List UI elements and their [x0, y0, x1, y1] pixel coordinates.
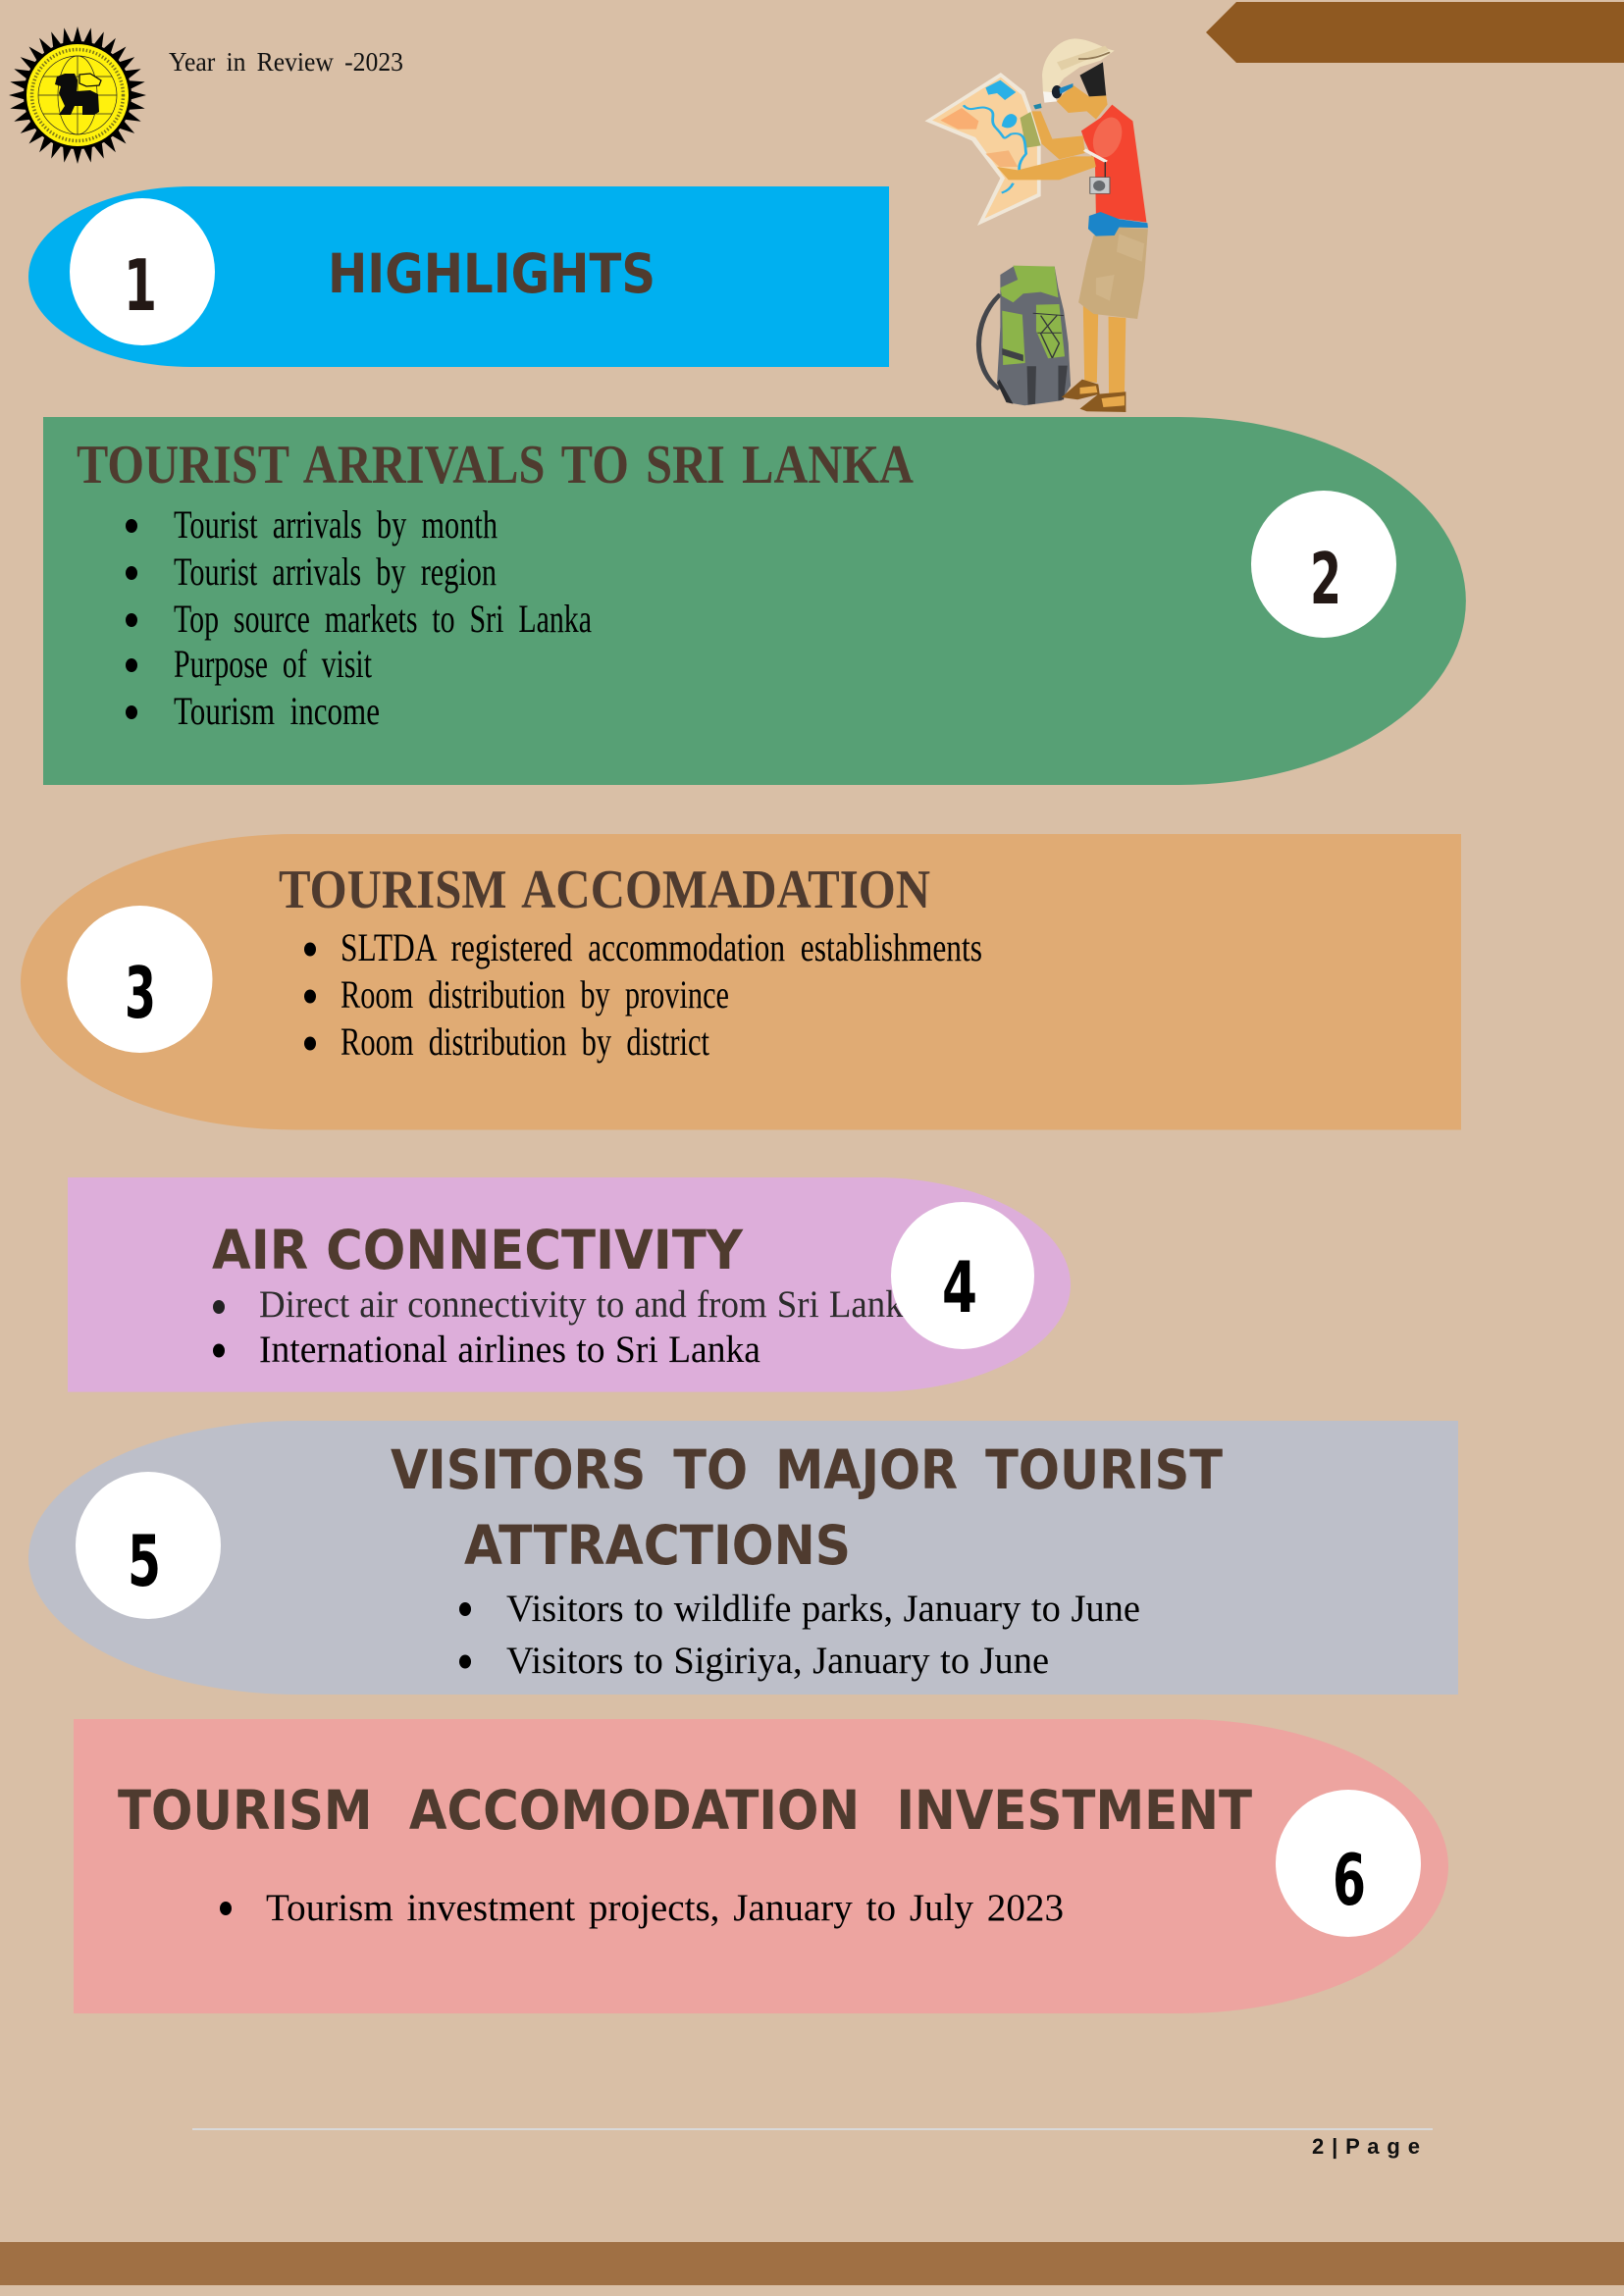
- number badge 4: [891, 1202, 1034, 1349]
- number badge 1: 1: [124, 244, 157, 327]
- number badge 4: 4: [942, 1246, 977, 1329]
- number badge 6: 6: [1333, 1839, 1366, 1921]
- heading: tourism accomadation: TOURISM ACCOMADATION: [279, 860, 930, 920]
- list: tourist arrivals topics: Top source markets to Sri Lanka: [174, 597, 592, 641]
- illustration: tourist with map and backpack: [925, 38, 1148, 412]
- panel 4: air connectivity: [68, 1177, 1071, 1392]
- list: tourist arrivals topics: Tourist arrivals by region: [174, 549, 497, 594]
- number badge 1: [70, 198, 215, 345]
- list: attraction topics: Visitors to Sigiriya, January to June: [506, 1640, 1049, 1682]
- header text: Year in Review -2023: [169, 47, 403, 77]
- heading: tourism accomodation investment: TOURISM ACCOMODATION INVESTMENT: [118, 1779, 1252, 1842]
- panel 6: accommodation investment: [74, 1719, 1448, 2013]
- backpack: [978, 266, 1071, 405]
- list: accommodation topics: Room distribution by district: [341, 1019, 709, 1064]
- heading: highlights: HIGHLIGHTS: [328, 242, 655, 305]
- list: tourist arrivals topics: [126, 502, 592, 733]
- list: tourist arrivals topics: Tourist arrivals by month: [174, 502, 498, 547]
- panel 1: highlights: [28, 186, 889, 367]
- page number: 2 | P a g e: [1312, 2134, 1420, 2159]
- heading: tourist arrivals: TOURIST ARRIVALS TO SRI LANKA: [77, 435, 914, 496]
- heading: visitors to major tourist attractions: ATTRACTIONS: [464, 1514, 851, 1577]
- list: investment topics: Tourism investment projects, January to July 2023: [266, 1887, 1064, 1929]
- list: air connectivity topics: International airlines to Sri Lanka: [259, 1329, 760, 1371]
- list: air connectivity topics: Direct air connectivity to and from Sri Lanka: [259, 1283, 919, 1326]
- list: tourist arrivals topics: Tourism income: [174, 689, 380, 733]
- heading: air connectivity: AIR CONNECTIVITY: [212, 1219, 744, 1281]
- number badge 5: [76, 1472, 221, 1619]
- list: accommodation topics: Room distribution by province: [341, 972, 729, 1017]
- red shirt: [1081, 105, 1146, 223]
- traveller figure: [997, 38, 1148, 412]
- heading: visitors to major tourist attractions: VISITORS TO MAJOR TOURIST: [391, 1438, 1223, 1501]
- number badge 2: [1251, 491, 1396, 638]
- panel 5: visitors to attractions: [28, 1421, 1458, 1695]
- number badge 6: [1276, 1790, 1421, 1937]
- shorts: [1078, 228, 1148, 319]
- logo: sunburst emblem: [9, 26, 146, 164]
- list: tourist arrivals topics: Purpose of visit: [174, 642, 372, 686]
- head and hat: [1057, 85, 1108, 120]
- bottom bar: [0, 2242, 1624, 2285]
- list: accommodation topics: SLTDA registered accommodation establishments: [341, 925, 982, 969]
- panel 2: tourist arrivals: [43, 417, 1466, 785]
- camera: [1104, 162, 1107, 179]
- arms: [1031, 111, 1085, 159]
- map: [925, 73, 1041, 226]
- number badge 3: 3: [125, 952, 156, 1034]
- list: attraction topics: Visitors to wildlife parks, January to June: [506, 1588, 1140, 1630]
- waist bag: [1088, 212, 1148, 236]
- list: accommodation topics: [304, 925, 982, 1064]
- heading: visitors to major tourist attractions: [391, 1438, 1223, 1577]
- list: attraction topics: [459, 1588, 1140, 1682]
- list: air connectivity topics: [213, 1283, 919, 1371]
- legs and sandals: [1083, 304, 1126, 394]
- number badge 3: [67, 906, 212, 1053]
- number badge 2: 2: [1310, 538, 1341, 620]
- top arrow banner: [1206, 2, 1624, 63]
- number badge 5: 5: [128, 1520, 161, 1602]
- panel 3: tourism accommodation: [21, 834, 1461, 1130]
